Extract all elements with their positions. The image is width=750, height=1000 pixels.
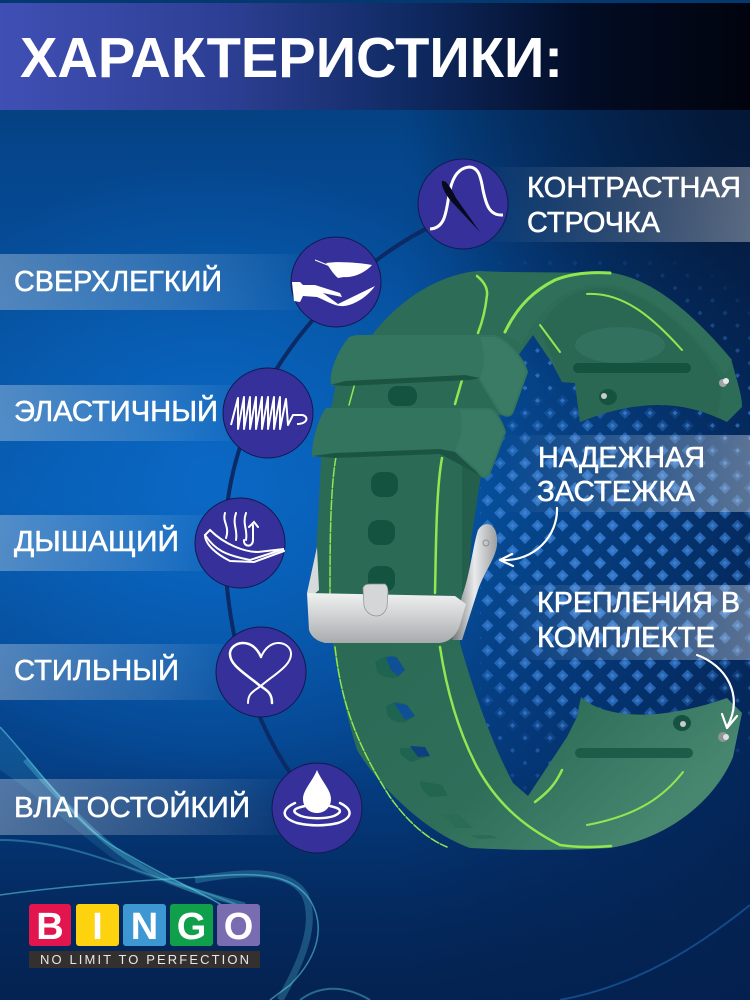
- upper strap pins: [599, 378, 729, 405]
- logo letters: G: [177, 906, 206, 948]
- label: mounts included: КРЕПЛЕНИЯ В: [537, 587, 740, 619]
- label: elastic: ЭЛАСТИЧНЫЙ: [14, 394, 218, 428]
- upper strap slot: [573, 363, 691, 373]
- label: reliable clasp: [537, 442, 705, 508]
- buckle: [307, 524, 497, 643]
- icon: spring: [223, 368, 313, 458]
- keeper hole: [388, 386, 417, 406]
- buckle left arm: [307, 547, 319, 595]
- label: reliable clasp: ЗАСТЕЖКА: [537, 476, 696, 508]
- icon: feather and hand: [291, 237, 381, 327]
- buckle front bar: [307, 593, 466, 643]
- logo letters: N: [131, 906, 158, 948]
- label: reliable clasp: НАДЕЖНАЯ: [538, 442, 705, 474]
- upper keeper: [333, 337, 526, 415]
- arrow: to mount: [697, 655, 737, 728]
- upper strap back segment: [365, 271, 742, 422]
- buckle right arm: [452, 524, 497, 640]
- feather: [315, 260, 372, 278]
- label: contrast stitching: [527, 172, 741, 239]
- lower strap pins: [673, 715, 729, 742]
- label: stylish: СТИЛЬНЫЙ: [14, 653, 179, 687]
- label: contrast stitching: КОНТРАСТНАЯ: [527, 172, 741, 204]
- logo tagline: [29, 951, 260, 968]
- lower strap slot: [575, 748, 693, 758]
- upper strap highlight: [575, 327, 665, 363]
- label: breathable: ДЫШАЩИЙ: [14, 524, 179, 558]
- label: ultralight: СВЕРХЛЕГКИЙ: [14, 264, 222, 298]
- icon: heart: [216, 627, 306, 717]
- logo letters: I: [92, 906, 103, 948]
- logo letters: [36, 906, 253, 948]
- right feature bars: [480, 167, 750, 660]
- upper strap inner face: [540, 288, 722, 422]
- arrow: to clasp: [500, 508, 557, 566]
- icon: breathable fabric: [195, 498, 285, 588]
- title: ХАРАКТЕРИСТИКИ:: [20, 26, 563, 90]
- icon: needle and thread: [418, 159, 508, 249]
- lower strap upper section between keepers: [330, 374, 505, 415]
- title band: [0, 3, 750, 110]
- strap holes: [368, 472, 498, 839]
- logo letters: B: [36, 906, 64, 948]
- connecting arc: [225, 222, 440, 820]
- icon: water drop: [272, 763, 362, 853]
- logo letters: O: [224, 906, 253, 948]
- label: contrast stitching: СТРОЧКА: [527, 207, 661, 239]
- left feature bars: [0, 254, 320, 835]
- logo: BINGO: [29, 904, 260, 968]
- logo tiles: [29, 904, 260, 946]
- buckle rivet: [483, 540, 489, 546]
- stitching: [330, 273, 683, 847]
- label: mounts included: КОМПЛЕКТЕ: [537, 622, 715, 654]
- label: waterproof: ВЛАГОСТОЙКИЙ: [14, 790, 250, 824]
- buckle prong: [363, 584, 388, 616]
- background waves: [0, 727, 750, 1000]
- upper strap rim: [503, 272, 732, 375]
- lower strap body: [314, 440, 742, 850]
- label: mounts included: [537, 587, 740, 654]
- lower strap right side wall: [462, 440, 492, 600]
- lower keeper: [314, 410, 504, 476]
- hand: [292, 282, 375, 306]
- watch strap: [307, 271, 742, 850]
- stitches between keepers: [349, 380, 462, 405]
- keeper edge shadows: [312, 375, 480, 476]
- logo: BINGO: NO LIMIT TO PERFECTION: [40, 952, 249, 967]
